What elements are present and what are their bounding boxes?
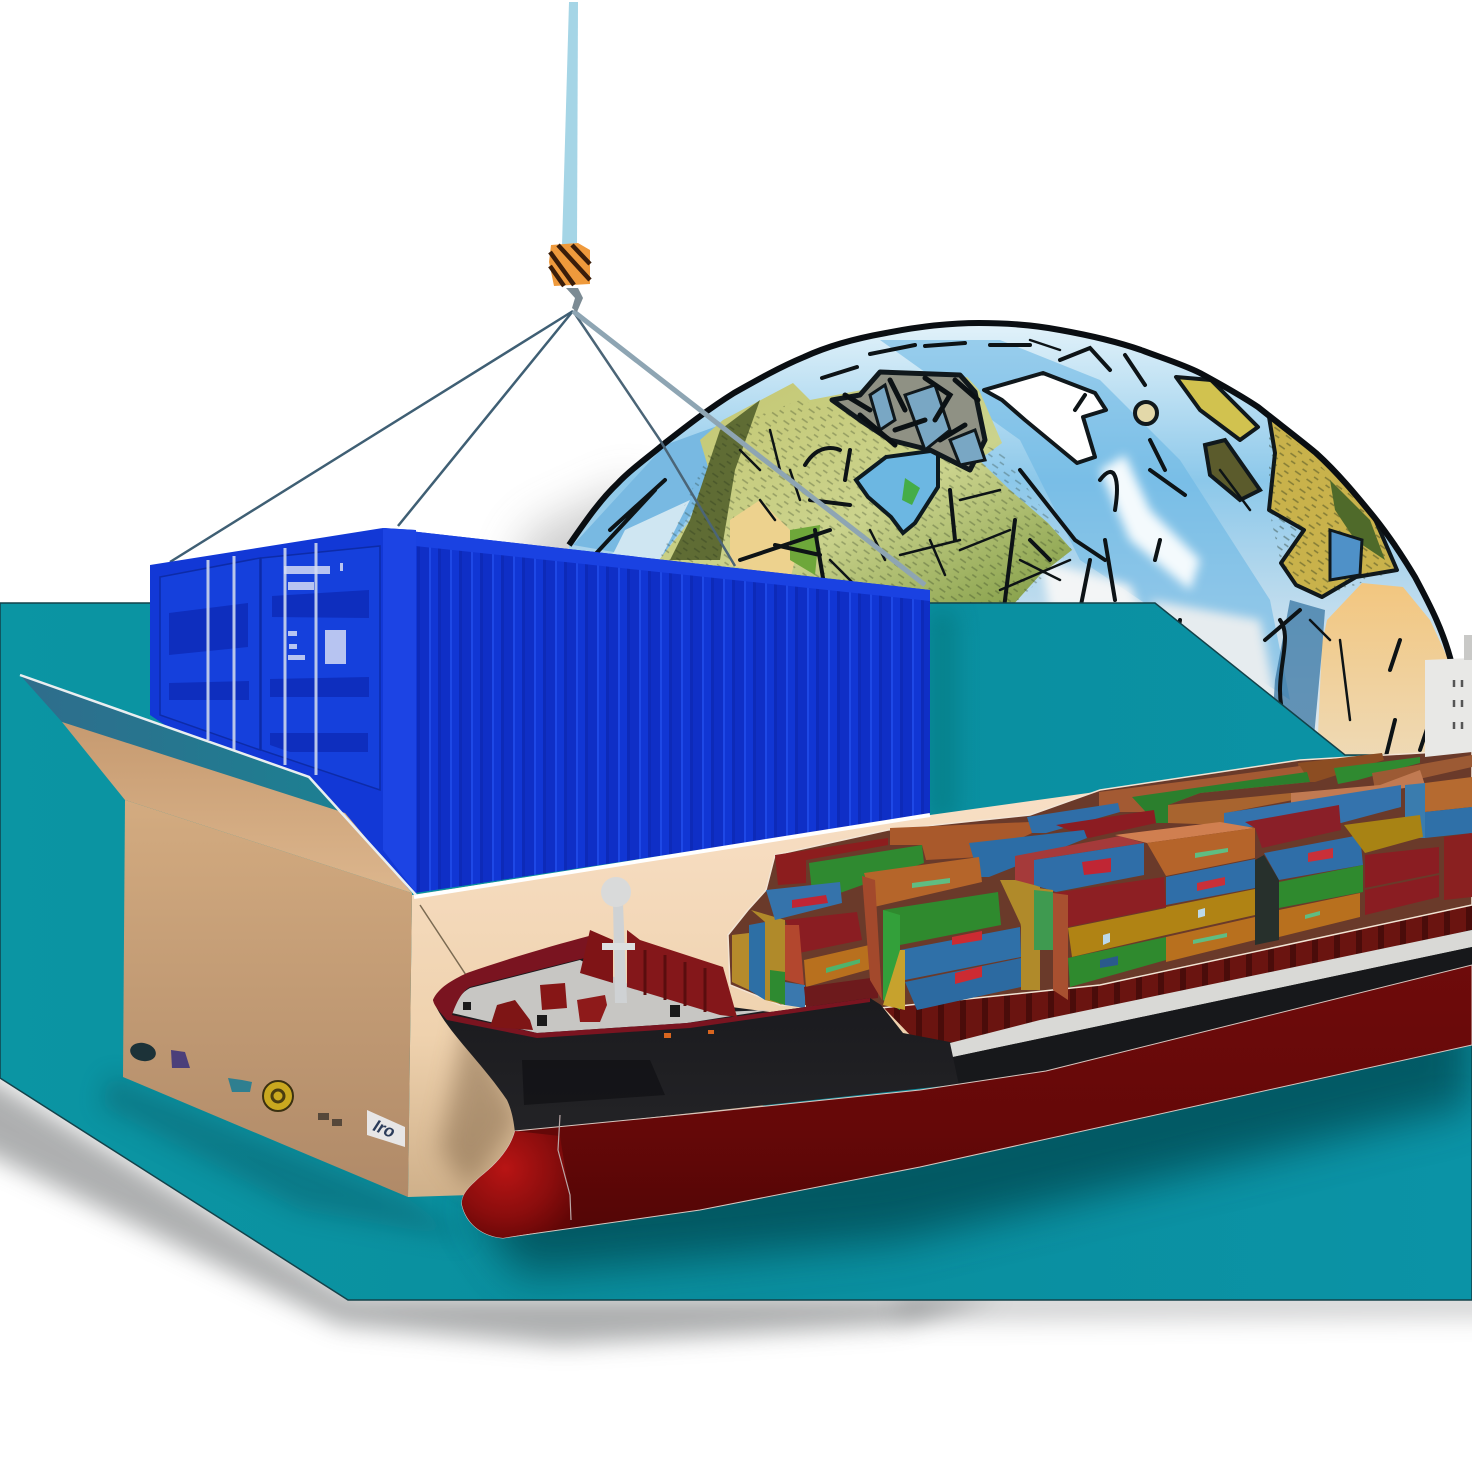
flap edges <box>20 675 416 895</box>
box front <box>123 800 412 1197</box>
side shade <box>440 1000 520 1190</box>
land: South America sand <box>1318 583 1448 754</box>
arctic islands <box>832 372 985 470</box>
cardboard box <box>20 675 1110 1197</box>
left ocean <box>573 425 720 560</box>
land: Greenland <box>984 373 1106 463</box>
fold line <box>420 905 466 975</box>
box inner flap <box>20 675 345 818</box>
left columns <box>732 933 749 990</box>
bay four <box>1245 805 1341 848</box>
logo: gold seal <box>263 1081 293 1111</box>
stack silhouette <box>728 750 1472 1008</box>
logo: teal mark <box>228 1078 252 1092</box>
box flap <box>62 722 412 893</box>
container doors <box>150 528 416 893</box>
door markings <box>284 563 346 664</box>
bulbous bow <box>462 1131 570 1238</box>
red hull <box>462 965 1472 1238</box>
container ship <box>433 635 1472 1238</box>
bay two <box>864 857 982 907</box>
bow seam <box>558 1115 571 1220</box>
shipping container <box>150 528 930 893</box>
globe outline <box>569 323 1452 665</box>
floor shadows <box>100 610 1472 1275</box>
stack of containers <box>728 750 1472 1010</box>
superstructure <box>1425 635 1472 757</box>
foredeck <box>452 960 770 1033</box>
locking rods <box>208 543 316 775</box>
box side panel <box>408 790 1110 1197</box>
deck machinery <box>463 983 680 1030</box>
bulwark <box>580 930 737 1017</box>
back row <box>1298 753 1384 782</box>
land: Europe and Africa <box>1176 377 1258 440</box>
hull openings <box>522 1060 665 1105</box>
bay three <box>1015 836 1144 885</box>
container top rail <box>383 528 930 601</box>
small marks <box>318 1113 342 1126</box>
land: Iceland <box>1135 402 1157 424</box>
container side <box>383 528 930 893</box>
logo: dark oval <box>128 1040 158 1064</box>
black sheer strip <box>953 947 1472 1090</box>
ocean <box>569 326 1446 732</box>
globe <box>560 320 1460 780</box>
teal floor <box>0 603 1472 1300</box>
pale south ocean <box>1148 596 1276 697</box>
mast <box>601 877 635 1003</box>
Hudson Bay <box>856 450 938 533</box>
white swirl <box>1100 455 1200 590</box>
logo: purple mark <box>171 1050 190 1068</box>
ink strokes <box>590 343 1430 760</box>
ground shadow <box>0 480 1472 1345</box>
white edge <box>414 815 930 897</box>
lifting cables <box>170 311 925 585</box>
bow rim <box>433 936 870 1038</box>
label sticker: Iro <box>371 1116 398 1142</box>
hook block <box>549 243 590 286</box>
white deck strip <box>950 930 1472 1057</box>
bay three right <box>1115 822 1255 843</box>
crane <box>170 2 925 585</box>
hook <box>566 288 583 312</box>
crane strap <box>562 2 578 246</box>
door recesses <box>169 590 369 752</box>
bay one <box>766 882 842 920</box>
hull lights <box>664 1030 714 1038</box>
label sticker <box>367 1110 405 1147</box>
land: North America <box>659 377 1072 605</box>
ship hull black <box>433 940 1472 1132</box>
red deck band under containers <box>881 897 1472 1043</box>
